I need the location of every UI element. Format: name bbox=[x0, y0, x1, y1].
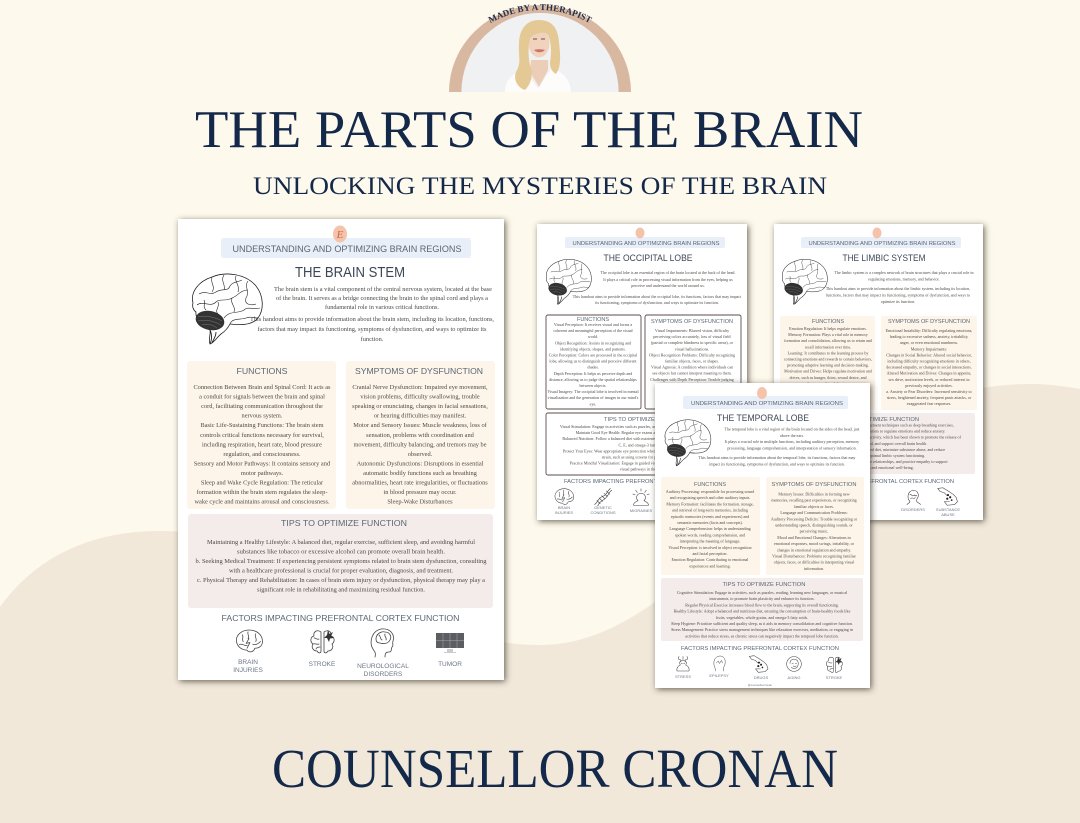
panel: symptoms of dysfunction: Visual Agnosia: A condition where individuals can bbox=[651, 365, 733, 370]
icon: tumor: TUMOR bbox=[438, 661, 462, 668]
intro text bbox=[250, 286, 494, 343]
section: factors impacting prefrontal cortex function: FACTORS IMPACTING PREFRONTAL CORTEX FUNCTION bbox=[798, 479, 954, 485]
panel: functions: Emotion Regulation: It helps regulate emotions. bbox=[789, 326, 867, 331]
panel: tips to optimize function: Regular Physical Exercise increases blood flow to the brain, supporting its overall functioning. bbox=[685, 602, 839, 608]
intro text: The limbic system is a complex network of brain structures that plays a crucial role in bbox=[834, 270, 974, 275]
panel: tips to optimize function: substances like tobacco or excessive alcohol can promote overall brain health. bbox=[237, 548, 445, 556]
intro text: above the ears. bbox=[780, 433, 804, 438]
panel: tips to optimize function: Cognitive Stimulation: Engage in activities, such as puzzles, reading, learning new languages, or musical bbox=[677, 590, 848, 596]
icon: stroke: STROKE bbox=[826, 675, 843, 680]
intro text bbox=[699, 426, 860, 468]
panel: functions: interpreting the meaning of language. bbox=[680, 539, 740, 544]
page title: THE LIMBIC SYSTEM bbox=[842, 253, 926, 263]
panel: tips to optimize function: endorphins, improve mood, and support overall brain health. bbox=[829, 441, 927, 447]
panel: tips to optimize function bbox=[188, 514, 493, 608]
icon: stress: STRESS bbox=[675, 674, 691, 679]
panel: symptoms of dysfunction: decreased empathy, or changes in social interactions. bbox=[886, 365, 972, 371]
panel: symptoms of dysfunction: sex drive, motivation levels, or reduced interest in bbox=[888, 377, 970, 383]
intro text: fundamental role in various critical functions. bbox=[325, 304, 439, 311]
panel: functions bbox=[546, 315, 641, 409]
intro text: function. bbox=[361, 336, 384, 343]
panel: functions: regulation, and consciousness. bbox=[223, 451, 301, 458]
panel: symptoms of dysfunction: Memory Issues: Difficulties in forming new bbox=[778, 492, 850, 496]
panel: tips to optimize function: Protect Your Eyes: Wear appropriate eye protection when engaging in activities that may cause eye bbox=[563, 448, 723, 453]
icon: disorders bbox=[901, 490, 925, 512]
panel: tips to optimize function: TIPS TO OPTIMIZE FUNCTION bbox=[837, 417, 919, 423]
panel: symptoms of dysfunction: including difficulty recognizing emotions in others, bbox=[887, 358, 971, 364]
panel: tips to optimize function: Visual Stimulation: Engage in activities such as puzzles, art, and reading to stimulate the visual cortex. bbox=[560, 424, 726, 430]
panel: tips to optimize function: activities that reduce stress, as chronic stress can negatively impact the temporal lobe function. bbox=[685, 633, 839, 639]
panel: functions: Visual Imagery: The occipital lobe is involved in mental bbox=[547, 389, 639, 394]
panel: functions: Depth Perception: It helps us perceive depth and bbox=[554, 371, 632, 376]
section: factors impacting prefrontal cortex function bbox=[222, 613, 464, 678]
brain illustration bbox=[782, 259, 827, 304]
panel: tips to optimize function: Balanced Nutrition: Follow a balanced diet with nutrients beneficial for eye health, like vitamins A, bbox=[562, 436, 724, 442]
panel: tips to optimize function: visual pathways in the mind. bbox=[620, 467, 666, 472]
panel: symptoms of dysfunction: previously enjoyed activities. bbox=[905, 383, 953, 388]
panel: functions: and retrieval of long-term memories, including bbox=[672, 508, 748, 514]
panel: functions: including respiration, heart rate, blood pressure bbox=[202, 441, 322, 448]
panel: tips to optimize function: c. Physical Therapy and Rehabilitation: In cases of brain stem injury or dysfunction, physical therapy may play a bbox=[197, 577, 485, 584]
panel: symptoms of dysfunction: emotional responses, mood swings, irritability, or bbox=[774, 541, 855, 547]
panel: tips to optimize function: Physical Activity: Engage in regular physical activity, which has been shown to promote the release of bbox=[795, 435, 962, 441]
section: factors impacting prefrontal cortex function bbox=[555, 479, 720, 515]
panel: symptoms of dysfunction: perceiving music. bbox=[800, 529, 828, 534]
panel: functions: spoken words, reading comprehension, and bbox=[675, 532, 745, 538]
page title: THE BRAIN STEM bbox=[295, 265, 405, 281]
icon: substance abuse bbox=[936, 488, 960, 517]
panel: symptoms of dysfunction: automatic bodily functions such as breathing bbox=[363, 470, 478, 477]
panel: tips to optimize function: Stress Management: Practice stress management techniques such as deep breathing exercises, bbox=[802, 422, 954, 428]
brain illustration bbox=[665, 420, 711, 466]
panel: tips to optimize function bbox=[780, 413, 975, 474]
panel: symptoms of dysfunction bbox=[881, 316, 977, 410]
icon: tumor bbox=[436, 633, 464, 668]
panel: symptoms of dysfunction: Memory Impairments: bbox=[911, 346, 947, 351]
icon: brain injuries: BRAIN bbox=[558, 505, 570, 510]
panel: functions: and facial perception. bbox=[693, 551, 727, 556]
panel: functions: Sleep and Wake Cycle Regulation: The reticular bbox=[201, 480, 324, 486]
icon: neurological disorders bbox=[357, 629, 409, 678]
panel: symptoms of dysfunction: Mood and Emotional Changes: Alterations in bbox=[777, 535, 851, 540]
intro text: The occipital lobe is an essential region of the brain located at the back of the head. bbox=[601, 270, 735, 275]
panel: symptoms of dysfunction: leading to excessive sadness, anxiety, irritability, bbox=[890, 334, 968, 340]
panel: symptoms of dysfunction: Sleep-Wake Disturbances bbox=[387, 499, 453, 506]
panel: symptoms of dysfunction: vision problems, difficulty swallowing, trouble bbox=[360, 394, 480, 401]
panel: tips to optimize function: C, E, and omega-3 fatty acids. bbox=[618, 442, 668, 448]
page header pill bbox=[801, 228, 961, 248]
panel: functions: FUNCTIONS bbox=[236, 366, 288, 376]
intro text: This handout aims to provide information about the temporal lobe, its functions, factors that may bbox=[699, 455, 855, 461]
panel: functions: Sensory and Motor Pathways: It contains sensory and bbox=[194, 460, 331, 467]
section: factors impacting prefrontal cortex function bbox=[675, 646, 843, 680]
panel: symptoms of dysfunction: perceiving colors accurately, loss of visual field bbox=[653, 334, 731, 340]
panel: functions: Visual Perception: is involved in object recognition bbox=[668, 545, 752, 550]
panel: functions: Auditory Processing: responsible for processing sound bbox=[666, 489, 754, 494]
intro text: perceive and understand the world around us. bbox=[631, 283, 705, 288]
panel: functions: formation within the brain stem regulates the sleep- bbox=[197, 489, 327, 496]
icon: substance abuse: SUBSTANCE bbox=[936, 507, 960, 512]
panel: symptoms of dysfunction: speaking or enunciating, changes in facial sensations, bbox=[352, 403, 488, 410]
handout page: the occipital lobe bbox=[537, 224, 747, 520]
panel: tips to optimize function: significant role in rehabilitating and maximizing residual function. bbox=[257, 586, 425, 594]
panel: tips to optimize function: fruits, vegetables, whole grains, and omega-3 fatty acids. bbox=[716, 615, 808, 621]
icon: substance abuse: ABUSE bbox=[941, 512, 955, 517]
panel: functions: Visual Perception: It receives visual and forms a bbox=[554, 322, 632, 327]
intro text: It plays a crucial role in multiple functions, including auditory perception, memory bbox=[725, 439, 859, 445]
background wave: beige bbox=[0, 384, 1080, 823]
page header pill: E bbox=[336, 229, 344, 241]
handout page: the temporal lobe bbox=[655, 383, 870, 688]
panel: functions: Learning: It contributes to the learning process by bbox=[788, 350, 868, 355]
panel: symptoms of dysfunction: observed. bbox=[408, 451, 433, 458]
panel: symptoms of dysfunction: objects, faces, or difficulties in interpreting visual bbox=[774, 560, 855, 566]
panel: functions: FUNCTIONS bbox=[694, 482, 726, 488]
panel: functions: motor pathways. bbox=[241, 470, 284, 477]
panel: tips to optimize function: b. Seeking Medical Treatment: If experiencing persistent symptoms related to brain stem dysfunction, consulting bbox=[196, 558, 487, 565]
icon: stroke bbox=[309, 630, 336, 668]
panel: symptoms of dysfunction: anger, or even emotional numbness. bbox=[900, 340, 958, 346]
subtitle: UNLOCKING THE MYSTERIES OF THE BRAIN bbox=[253, 173, 827, 200]
panel: functions: formation and consolidation, allowing us to retain and bbox=[784, 338, 872, 344]
panel: symptoms of dysfunction: SYMPTOMS OF DYSFUNCTION bbox=[772, 482, 857, 488]
section: factors impacting prefrontal cortex function: FACTORS IMPACTING PREFRONTAL CORTEX FUNCTION bbox=[564, 479, 720, 485]
icon: stress bbox=[675, 656, 691, 679]
panel: symptoms of dysfunction: familiar objects or faces. bbox=[794, 504, 834, 509]
panel: symptoms of dysfunction: understanding speech, distinguishing sounds, or bbox=[775, 522, 853, 528]
panel: symptoms of dysfunction: SYMPTOMS OF DYSFUNCTION bbox=[355, 366, 483, 376]
intro text: its functioning, symptoms of dysfunction, and ways to optimize its function. bbox=[595, 300, 719, 306]
panel: tips to optimize function: Healthy Lifestyle: Adopt a balanced and nutritious diet, ensuring the consumption of brain-healthy foods like bbox=[674, 609, 851, 615]
icon: aging: AGING bbox=[788, 675, 800, 680]
panel: tips to optimize function: with a healthcare professional is crucial for proper evaluation, diagnosis, and treatment. bbox=[229, 568, 453, 574]
panel: functions bbox=[187, 361, 336, 509]
panel: symptoms of dysfunction: visual hallucinations. bbox=[675, 346, 709, 351]
section: factors impacting prefrontal cortex function: FACTORS IMPACTING PREFRONTAL CORTEX FUNCTION bbox=[222, 613, 460, 623]
panel: tips to optimize function: social connection and emotional well-being. bbox=[842, 465, 914, 470]
panel: symptoms of dysfunction: information. bbox=[804, 566, 824, 571]
panel: functions: connecting emotions and rewards to certain behaviors, bbox=[784, 356, 872, 362]
icon: disorders: DISORDERS bbox=[901, 507, 925, 512]
intro text: The brain stem is a vital component of the central nervous system, located at the base bbox=[274, 286, 492, 293]
icon: epilepsy bbox=[709, 656, 729, 678]
intro text: factors that may impact its functioning, symptoms of dysfunction, and ways to optimize its bbox=[258, 326, 487, 333]
page title: THE OCCIPITAL LOBE bbox=[604, 253, 692, 263]
panel: functions: coherent and meaningful perception of the visual bbox=[553, 328, 634, 333]
panel: symptoms of dysfunction: Visual Disturbances: Problems recognizing familiar bbox=[772, 554, 857, 558]
panel: functions: pleasure-seeking behaviors. bbox=[806, 381, 850, 386]
icon: stroke: STROKE bbox=[309, 661, 336, 668]
intro text bbox=[826, 270, 974, 304]
panel: functions: Color Perception: Colors are processed in the occipital bbox=[549, 352, 638, 358]
footer brand name: COUNSELLOR CRONAN bbox=[272, 738, 838, 799]
panel: functions: visualization and the generation of images in our mind's bbox=[548, 395, 639, 400]
badge: made by a therapist portrait bbox=[449, 4, 631, 92]
panel: symptoms of dysfunction: Changes in Social Behavior: Altered social behavior, bbox=[886, 352, 972, 358]
icon: drugs: DRUGS bbox=[754, 675, 769, 680]
panel: symptoms of dysfunction: see objects but cannot interpret meaning to them. bbox=[652, 371, 732, 376]
icon: genetic conditions: CONDITIONS bbox=[590, 510, 616, 515]
panel: functions: FUNCTIONS bbox=[577, 317, 609, 323]
intro text: impact its functioning, symptoms of dysfunction, and ways to optimize its function. bbox=[709, 462, 845, 468]
panel: symptoms of dysfunction: stress, heightened anxiety, frequent panic attacks, or bbox=[887, 395, 972, 401]
footer handle: @counsellorcronan bbox=[748, 683, 773, 687]
intro text: It plays a critical role in processing visual information from the eyes, helping us bbox=[603, 277, 733, 283]
panel: symptoms of dysfunction bbox=[645, 315, 741, 409]
main title: THE PARTS OF THE BRAIN bbox=[195, 101, 863, 159]
panel: tips to optimize function: Maintain Good Eye Health: Regular eye exams and corrective lenses when needed. bbox=[576, 430, 710, 435]
panel: symptoms of dysfunction: familiar objects, faces, or shapes. bbox=[665, 358, 719, 364]
page title: THE TEMPORAL LOBE bbox=[717, 413, 809, 424]
page header pill bbox=[565, 228, 725, 248]
panel: functions: controls critical functions necessary for survival, bbox=[200, 432, 324, 439]
panel: functions: Memory Formation: Plays a vital role in memory bbox=[788, 332, 868, 337]
intro text: This handout aims to provide information about the limbic system, including its location, bbox=[826, 286, 970, 292]
panel: functions: distance, allowing us to judge the spatial relationships bbox=[549, 377, 637, 383]
icon: neurological disorders: NEUROLOGICAL bbox=[357, 663, 409, 670]
panel: tips to optimize function: TIPS TO OPTIMIZE FUNCTION bbox=[281, 518, 407, 528]
handout page: the limbic system bbox=[774, 224, 983, 520]
panel: symptoms of dysfunction: exaggerated fear responses. bbox=[907, 401, 951, 406]
page header pill bbox=[683, 387, 848, 409]
section: factors impacting prefrontal cortex function bbox=[798, 479, 960, 517]
panel: functions: between objects. bbox=[580, 383, 606, 388]
panel: functions: eye. bbox=[590, 401, 596, 406]
panel: functions: lobe, allowing us to distinguish and perceive different bbox=[549, 359, 637, 365]
panel: symptoms of dysfunction: Challenges with Depth Perception: Trouble judging bbox=[650, 377, 734, 382]
icon: brain injuries bbox=[555, 489, 574, 515]
panel: tips to optimize function: Sleep Hygiene: Prioritize sufficient and quality sleep, as it aids in memory consolidation and cognitive function. bbox=[671, 621, 853, 627]
panel: functions bbox=[661, 477, 760, 575]
page header pill: UNDERSTANDING AND OPTIMIZING BRAIN REGIONS bbox=[808, 241, 956, 247]
panel: functions: drives, such as hunger, thirst, sexual desire, and bbox=[789, 375, 867, 381]
intro text: The temporal lobe is a vital region of the brain located on the sides of the head, just bbox=[724, 426, 860, 432]
panel: functions: FUNCTIONS bbox=[812, 319, 844, 325]
panel: tips to optimize function: TIPS TO OPTIMIZE FUNCTION bbox=[604, 417, 686, 423]
panel: functions: world. bbox=[588, 334, 598, 339]
intro text: processing, language comprehension, and interpretation of sensory information. bbox=[727, 446, 857, 452]
panel: symptoms of dysfunction: memories, recalling past experiences, or recognizing bbox=[771, 498, 857, 504]
panel: functions: shades. bbox=[587, 365, 599, 370]
panel: functions: semantic memories (facts and concepts). bbox=[677, 520, 743, 525]
panel: symptoms of dysfunction bbox=[346, 361, 495, 509]
panel: tips to optimize function: TIPS TO OPTIMIZE FUNCTION bbox=[722, 582, 806, 588]
intro text: optimize its function. bbox=[881, 299, 915, 304]
page header pill: UNDERSTANDING AND OPTIMIZING BRAIN REGIONS bbox=[691, 401, 843, 407]
intro text: of the brain. It serves as a bridge connecting the brain to the spinal cord and plays a bbox=[276, 295, 488, 302]
panel: symptoms of dysfunction: SYMPTOMS OF DYSFUNCTION bbox=[888, 319, 970, 325]
panel: tips to optimize function: Practice Mindful Visualization: Engage in guided visualization exercises that stimulate the bbox=[570, 461, 716, 466]
panel: symptoms of dysfunction: Autonomic Dysfunctions: Disruptions in essential bbox=[357, 460, 484, 467]
icon: drugs bbox=[749, 656, 769, 680]
intro text: This handout aims to provide information about the occipital lobe, its functions, factors that may impact bbox=[573, 294, 742, 300]
section: factors impacting prefrontal cortex function: FACTORS IMPACTING PREFRONTAL CORTEX FUNCTION bbox=[681, 646, 839, 652]
icon: brain injuries: INJURIES bbox=[233, 667, 263, 674]
panel: functions bbox=[780, 316, 875, 410]
icon: neurological disorders: DISORDERS bbox=[364, 671, 403, 678]
intro text: This handout aims to provide information about the brain stem, including its location, functions, bbox=[250, 316, 494, 323]
brain illustration bbox=[192, 274, 262, 344]
intro text bbox=[573, 270, 742, 306]
icon: stroke bbox=[826, 657, 843, 680]
icon: genetic conditions bbox=[590, 489, 616, 515]
panel: symptoms of dysfunction: Visual Impairments: Blurred vision, difficulty bbox=[655, 328, 729, 334]
handout page: the brain stem bbox=[178, 219, 504, 680]
panel: tips to optimize function: meditation, or engaging in creative outlets to regulate emotions and reduce anxiety. bbox=[811, 429, 945, 435]
brain illustration bbox=[546, 259, 591, 304]
icon: migraines bbox=[630, 489, 653, 513]
panel: functions: Memory Formation: facilitates the formation, storage, bbox=[666, 501, 754, 507]
icon: brain injuries: BRAIN bbox=[238, 659, 258, 666]
panel: functions: episodic memories (events and experiences) and bbox=[671, 514, 749, 519]
panel: functions: and recognizing speech and other auditory inputs. bbox=[670, 495, 750, 500]
panel: symptoms of dysfunction: Altered Motivation and Drives: Changes in appetite, bbox=[887, 371, 971, 377]
page header pill: UNDERSTANDING AND OPTIMIZING BRAIN REGIONS bbox=[572, 241, 720, 247]
page header pill: UNDERSTANDING AND OPTIMIZING BRAIN REGIONS bbox=[232, 244, 462, 254]
panel: functions: promoting adaptive learning and decision-making. bbox=[787, 363, 869, 368]
panel: tips to optimize function: Stress Management: Practice stress management techniques like relaxation exercises, meditation, or engaging in bbox=[671, 627, 853, 633]
panel: symptoms of dysfunction: Object Recognition Problems: Difficulty recognizing bbox=[649, 352, 735, 357]
icon: genetic conditions: GENETIC bbox=[594, 505, 612, 510]
panel: symptoms of dysfunction: changes in emotional regulation and empathy. bbox=[777, 547, 851, 552]
page header pill bbox=[221, 226, 471, 258]
panel: functions: Motivation and Drives: Helps regulate motivation and bbox=[784, 369, 872, 374]
panel: symptoms of dysfunction: Cranial Nerve Dysfunction: Impaired eye movement, bbox=[352, 384, 488, 391]
panel: symptoms of dysfunction: Emotional Instability: Difficulty regulating emotions, bbox=[886, 328, 972, 334]
panel: functions: Emotion Regulation: Contributing to emotional bbox=[672, 557, 749, 562]
panel: symptoms of dysfunction: (partial or complete blindness in specific areas), or bbox=[651, 340, 734, 346]
panel: symptoms of dysfunction: movement, difficulty balancing, and tremors may be bbox=[353, 441, 487, 448]
icon: aging bbox=[787, 657, 801, 680]
intro text: functions, factors that may impact its functioning, symptoms of dysfunction, and ways to bbox=[826, 292, 970, 298]
panel: functions: Basic Life-Sustaining Functions: The brain stem bbox=[200, 422, 324, 429]
panel: symptoms of dysfunction: abnormalities, heart rate irregularities, or fluctuations bbox=[352, 480, 488, 486]
panel: symptoms of dysfunction: Language and Communication Problems: bbox=[780, 510, 848, 515]
panel: functions: nervous system. bbox=[242, 413, 283, 420]
panel: tips to optimize function: strain, such as using screens for prolonged periods. bbox=[602, 454, 684, 460]
panel: functions: identifying objects, shapes, and patterns. bbox=[560, 346, 626, 352]
panel: tips to optimize function: Social Connections: Engage in positive relationships, and practice empathy to support bbox=[808, 459, 949, 465]
panel: symptoms of dysfunction: or hearing difficulties may manifest. bbox=[374, 413, 467, 420]
panel: functions: cord, facilitating communication throughout the bbox=[201, 403, 323, 410]
panel: symptoms of dysfunction: a. Anxiety or Fear Disorders: Increased sensitivity to bbox=[886, 389, 972, 394]
panel: functions: a conduit for signals between the brain and spinal bbox=[199, 394, 325, 401]
intro text: regulating emotions, memory, and behavior. bbox=[868, 276, 940, 282]
panel: tips to optimize function bbox=[546, 413, 741, 475]
icon: migraines: MIGRAINES bbox=[630, 508, 653, 513]
panel: symptoms of dysfunction: Motor and Sensory Issues: Muscle weakness, loss of bbox=[353, 422, 488, 429]
panel: symptoms of dysfunction: sensation, problems with coordination and bbox=[366, 432, 475, 439]
panel: tips to optimize function bbox=[661, 578, 863, 641]
panel: symptoms of dysfunction bbox=[766, 477, 864, 575]
panel: tips to optimize function: instruments, to promote brain plasticity and enhance its function. bbox=[709, 596, 815, 602]
panel: symptoms of dysfunction: in blood pressure may occur. bbox=[383, 489, 457, 496]
panel: functions: experiences and learning. bbox=[689, 563, 731, 568]
panel: tips to optimize function: Maintaining a Healthy Lifestyle: A balanced diet, regular exercise, sufficient sleep, and avoiding harmful bbox=[207, 539, 475, 546]
panel: tips to optimize function: Healthy Lifestyle: Maintain a balanced diet, minimize substance abuse, and reduce bbox=[811, 447, 945, 453]
panel: functions: recall information over time. bbox=[805, 344, 851, 349]
panel: tips to optimize function: stress levels to support optimal limbic system functioning. bbox=[831, 453, 925, 458]
badge caption: MADE BY A THERAPIST bbox=[488, 4, 592, 23]
panel: functions: wake cycle and maintains arousal and consciousness. bbox=[194, 499, 330, 506]
panel: functions: Language Comprehension: helps in understanding bbox=[669, 526, 751, 531]
icon: brain injuries: INJURIES bbox=[555, 510, 573, 515]
icon: brain injuries bbox=[233, 630, 263, 674]
panel: symptoms of dysfunction: SYMPTOMS OF DYSFUNCTION bbox=[651, 319, 733, 325]
icon: epilepsy: EPILEPSY bbox=[709, 673, 729, 678]
panel: functions: Object Recognition: Assists in recognizing and bbox=[555, 340, 631, 345]
panel: symptoms of dysfunction: Auditory Processing Deficits: Trouble recognizing or bbox=[771, 516, 858, 521]
panel: functions: Connection Between Brain and Spinal Cord: It acts as bbox=[193, 384, 331, 391]
